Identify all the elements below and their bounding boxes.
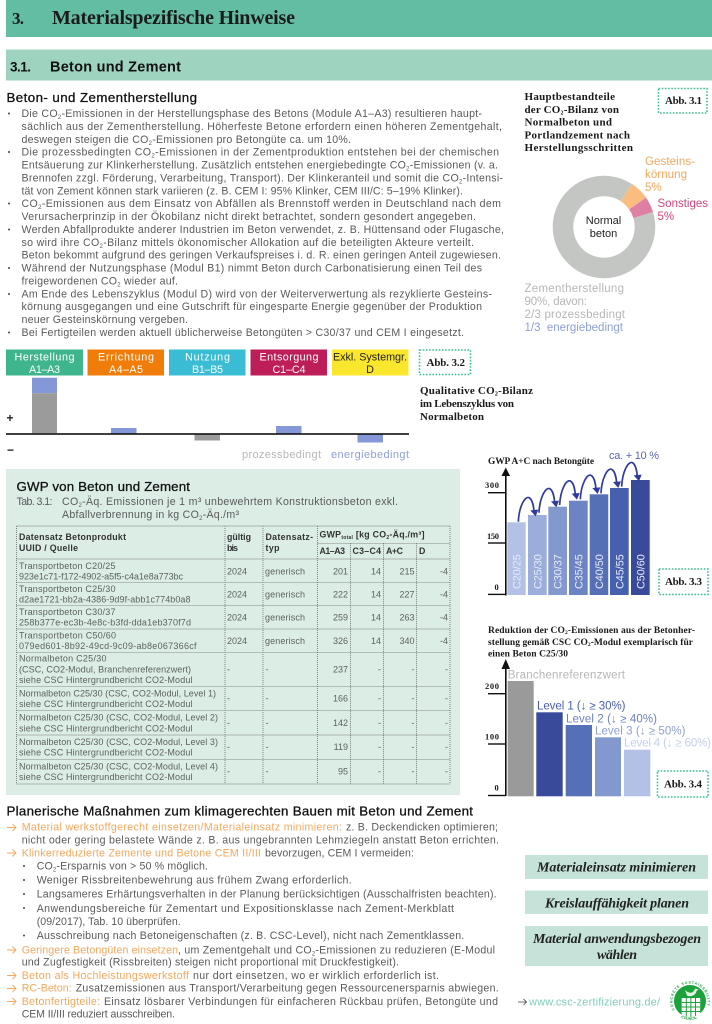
text block: production bullet list: Bei Fertigteilen werden aktuell üblicherweise Betongüten > C30/37 und CEM I eingesetzt. [22, 327, 464, 339]
text block: production bullet list: körnung ausgegangen und eine Gutschrift für eingesparte Energie gegenüber der Produktion [22, 301, 482, 313]
text block: planning measures: Geringere Betongüten einsetzen [22, 944, 178, 956]
figure title: Abb 3.1: der CO [524, 104, 560, 116]
text block: planning measures: RC-Beton: [22, 983, 72, 995]
bar chart: qualitative life cycle balance: − [7, 443, 14, 457]
table: GWP data: Normalbeton C25/30 [19, 654, 106, 664]
text block: production bullet list: -Emissionen pro Betongüte ca. um 10%. [152, 134, 351, 146]
table: GWP data: 14 [371, 612, 381, 622]
bar chart: Reduktion nach CSC CO2-Modul: Level 1 (↓ ≥ 30%) [537, 701, 626, 713]
text block: planning measures: 2 [312, 951, 316, 957]
text block: planning measures: und Zugfestigkeit (Rissbreiten) steigen nicht proportional mit Druckfestigkeit). [22, 957, 399, 969]
life cycle phase headers: Herstellung [14, 352, 74, 364]
bar chart: GWP A+C nach Betongüte: C25/30 [532, 554, 544, 589]
table: GWP data: bis [227, 543, 238, 553]
text block: production bullet list: 2 [117, 282, 121, 288]
section header bar: Beton und Zement [50, 60, 181, 76]
life cycle phase headers: B1–B5 [192, 364, 223, 376]
life cycle phase headers: A1–A3 [29, 364, 60, 376]
table: GWP data: -4 [440, 566, 448, 576]
text block: planning measures: Beton als Hochleistungswerkstoff [22, 970, 189, 982]
text block: production bullet list: 2 [100, 244, 104, 250]
table: GWP data: GWP [320, 530, 341, 540]
text block: production bullet list: -Emissionen in der Herstellungsphase des Betons (Module A1–A3) resultieren haupt- [61, 108, 482, 120]
bar chart: GWP A+C nach Betongüte: 150 [487, 531, 499, 541]
text block: planning measures: , um Zementgehalt und CO [178, 944, 312, 956]
figure title: Abb 3.1: Herstellungsschritten [524, 142, 633, 154]
table: GWP data: -4 [440, 636, 448, 646]
table: GWP data: Datensatz- [266, 532, 313, 542]
table: GWP data: 259 [333, 612, 348, 622]
life cycle phase headers [6, 350, 408, 376]
label: Abb. 3.4 [658, 771, 708, 797]
bar chart: GWP A+C nach Betongüte: C35/45 [574, 554, 586, 589]
table: GWP data: 079ed601-8b92-49cd-9c09-ab8e067366cf [19, 641, 197, 651]
text block: planning measures: Weniger Rissbreitenbewehrung aus frühem Zwang erforderlich. [37, 875, 352, 887]
life cycle phase headers: Exkl. Systemgr. [333, 352, 407, 364]
bar chart: qualitative life cycle balance: prozessbedingt [242, 449, 321, 461]
bar chart: GWP A+C nach Betongüte: C45/55 [614, 554, 626, 589]
text block: production bullet list: 2 [406, 166, 410, 172]
donut label: Sonstiges: 5% [658, 211, 674, 223]
chapter header bar [6, 0, 712, 37]
text block: production bullet list: neuer Gesteinskörnung vergeben. [22, 314, 188, 326]
table: GWP data: 142 [333, 718, 348, 728]
table: GWP data: siehe CSC Hintergrundbericht CO2-Modul [19, 699, 192, 709]
life cycle phase headers: A4–A5 [109, 364, 143, 376]
table: GWP data: D [419, 546, 425, 556]
table: GWP data: siehe CSC Hintergrundbericht CO2-Modul [19, 723, 192, 733]
callout: Materialeinsatz minimieren [525, 855, 708, 879]
table: GWP data: - [227, 718, 230, 728]
donut label: Zementherstellung: 90%, davon: [524, 296, 587, 308]
chapter header bar: Materialspezifische Hinweise [52, 7, 295, 29]
table: GWP data: 340 [399, 636, 414, 646]
table: GWP data: - [266, 766, 268, 776]
label: Abb. 3.3: Abb. 3.3 [665, 576, 702, 588]
label: Abb. 3.2: Abb. 3.2 [426, 357, 466, 369]
text block: production bullet list: -Emissionen (v. a. [410, 160, 498, 172]
text block: production bullet list: sächlich aus der Zementherstellung. Höherfeste Betone erfordern einen höheren Zementgehalt, [22, 121, 502, 133]
table: GWP data: 14 [371, 566, 381, 576]
table: GWP data: - [378, 766, 381, 776]
table: GWP data: 2024 [227, 612, 247, 622]
table: GWP data: 201 [333, 566, 348, 576]
table: GWP data: -4 [440, 612, 448, 622]
table: GWP data: Normalbeton C25/30 (CSC, CO2-Modul, Level 3) [19, 737, 218, 747]
text block: planning measures: nicht oder gering belastete Wände z. B. aus ungebrannten Lehmziegeln anstatt Beton errichten. [22, 835, 499, 847]
text block: planning measures: Langsameres Erhärtungsverhalten in der Planung berücksichtigen (Ausschalfristen beachten). [37, 889, 497, 901]
donut label: Sonstiges [658, 198, 708, 223]
text block: planning measures: bevorzugen, CEM I vermeiden: [265, 847, 414, 859]
callout: Material anwendungsbezogen wählen [525, 926, 708, 966]
figure title: Abb 3.2: Normalbeton [420, 411, 484, 423]
donut label: Zementherstellung: Zementherstellung [524, 283, 624, 295]
bar chart: GWP A+C nach Betongüte: GWP A+C nach Betongüte [488, 457, 594, 467]
table: GWP data: Transportbeton C50/60 [19, 630, 116, 640]
bar chart: Reduktion nach CSC CO2-Modul: einen Beton C25/30 [488, 650, 568, 660]
text block: planning measures: 2 [53, 868, 57, 874]
figure title: Abb 3.2: -Bilanz [498, 385, 533, 397]
text block: production bullet list: 2 [58, 115, 62, 121]
table: GWP data: 263 [399, 612, 414, 622]
link: CSC website: www.csc-zertifizierung.de/ [528, 996, 661, 1008]
table: GWP data: - [412, 742, 414, 752]
text block: production bullet list: 2 [459, 179, 463, 185]
label: Abb. 3.1 [658, 88, 707, 113]
bar chart: qualitative life cycle balance [6, 378, 409, 461]
label: Abb. 3.1: Abb. 3.1 [665, 95, 702, 107]
donut label: Zementherstellung: 2/3 prozessbedingt [524, 309, 626, 321]
text block: planning measures: Material werkstoffgerecht einsetzen/Materialeinsatz minimieren: [22, 822, 342, 834]
donut label: Gesteinskörnung: 5% [645, 182, 662, 194]
text block: planning measures: (09/2017), Tab. 10 überprüfen. [37, 916, 181, 928]
bar chart: Reduktion nach CSC CO2-Modul: 2 [565, 630, 568, 636]
table: GWP data: 222 [333, 590, 348, 600]
text block: production bullet list: Beton bekommt aufgrund des geringen Verkaufspreises i. d. R. einen geringen Anteil zugewiesen. [22, 250, 501, 262]
table: GWP data: siehe CSC Hintergrundbericht CO2-Modul [19, 772, 192, 782]
text block: planning measures: -Emissionen zu reduzieren (E-Modul [315, 944, 495, 956]
figure title: Abb 3.2 [420, 385, 533, 423]
donut label: Zementherstellung [524, 283, 626, 334]
callout: Materialeinsatz minimieren: Materialeinsatz minimieren [536, 861, 696, 876]
text block: production bullet list: deswegen steigen die CO [22, 134, 148, 146]
bar chart: GWP A+C nach Betongüte [485, 450, 659, 596]
growth arrows [518, 462, 642, 522]
table: GWP data: (CSC, CO2-Modul, Branchenreferenzwert) [19, 664, 191, 674]
text block: planning measures: CO [37, 861, 53, 873]
table: GWP data: 95 [338, 766, 348, 776]
text block: planning measures: Ausschreibung nach Betoneigenschaften (z. B. CSC-Level), nicht nach Zementklassen. [37, 930, 464, 942]
text block: planning measures [7, 822, 499, 1021]
donut label: Gesteinskörnung: körnung [645, 169, 687, 181]
bar chart: Reduktion nach CSC CO2-Modul: Reduktion der CO [488, 626, 565, 636]
callout: Kreislauffähigkeit planen [525, 890, 708, 914]
text block: planning measures: Zusatzemissionen aus Transport/Verarbeitung gegen Ressourcenersparnis abwiegen. [76, 983, 499, 995]
text block: production bullet list: Während der Nutzungsphase (Modul B1) nimmt Beton durch Carbonatisierung einen Teil des [22, 263, 482, 275]
table: GWP data: - [445, 718, 448, 728]
table: GWP data: 14 [371, 590, 381, 600]
bar chart: Reduktion nach CSC CO2-Modul: Level 2 (↓ ≥ 40%) [566, 713, 657, 725]
figure title: Abb 3.1 [524, 91, 633, 154]
table: GWP data: siehe CSC Hintergrundbericht CO2-Modul [19, 748, 192, 758]
text block: production bullet list: Die CO [22, 108, 58, 120]
text block: production bullet list: CO [22, 198, 38, 210]
table: GWP data: 119 [334, 742, 348, 752]
table: GWP data: 2024 [227, 636, 247, 646]
table caption: Tab. 3.1: [16, 496, 52, 508]
table: GWP data: - [266, 718, 268, 728]
table: GWP data: - [412, 718, 414, 728]
heading: Beton- und Zementherstellung: Beton- und Zementherstellung [6, 90, 197, 105]
table: GWP data: - [378, 664, 381, 674]
table: GWP data: - [412, 694, 414, 704]
text block: production bullet list: -Emissionen in der Zementproduktion entstehen bei der chemischen [155, 147, 499, 159]
text block: production bullet list: Brennofen zzgl. Förderung, Verarbeitung, Transport). Der Klinkeranteil und somit die CO [22, 172, 459, 184]
table: GWP data: Transportbeton C20/25 [19, 561, 116, 571]
bar chart: Reduktion nach CSC CO2-Modul: -Modul exemplarisch für [591, 638, 694, 648]
bar chart: Reduktion nach CSC CO2-Modul: Branchenreferenzwert [508, 669, 626, 681]
bar chart: qualitative life cycle balance: energiebedingt [331, 449, 409, 461]
text block: planning measures: CEM II/III reduziert ausschreiben. [22, 1009, 175, 1021]
table: GWP data: - [227, 694, 230, 704]
table: GWP data: C3–C4 [352, 546, 381, 556]
bar chart: GWP A+C nach Betongüte: 300 [485, 480, 499, 490]
figure title: Abb 3.1: -Bilanz von [564, 104, 619, 116]
text block: production bullet list: Werden Abfallprodukte anderer Industrien im Beton verwendet, z. B. Hüttensand oder Flugasche, [22, 224, 504, 236]
icon: CSC logo: COUNCIL [682, 1016, 697, 1020]
callout: Material anwendungsbezogen wählen: Material anwendungsbezogen [532, 932, 701, 947]
text block: production bullet list: Am Ende des Lebenszyklus (Modul D) wird von der Weiterverwertung als rezyklierte Gesteins- [22, 288, 492, 300]
text block: production bullet list: so wird ihre CO [22, 237, 99, 249]
table: GWP data: typ [266, 543, 280, 553]
table: GWP data: -Äq./m³] [389, 530, 425, 540]
table: GWP data: 2024 [227, 590, 247, 600]
table: GWP data: - [445, 664, 448, 674]
table: GWP data: 166 [333, 694, 348, 704]
table: GWP data: 227 [399, 590, 414, 600]
table: GWP data: - [378, 742, 381, 752]
text block: production bullet list: tät von Zement können stark variieren (z. B. CEM I: 95% Klinker, CEM III/C: 5–19% Klinker). [22, 185, 463, 197]
text block: production bullet list: 2 [38, 205, 42, 211]
text block: planning measures: Anwendungsbereiche für Zementart und Expositionsklasse nach Zement-Merkblatt [37, 903, 454, 915]
table: GWP data: A+C [386, 546, 404, 556]
bar chart: GWP A+C nach Betongüte: C30/37 [552, 554, 564, 589]
table: GWP data: siehe CSC Hintergrundbericht CO2-Modul [19, 675, 192, 685]
table: GWP data [16, 526, 450, 784]
table: GWP data: - [266, 664, 268, 674]
bar chart: Reduktion nach CSC CO2-Modul: 0 [494, 783, 499, 793]
table: GWP data: - [227, 766, 230, 776]
panel: GWP von Beton und Zement [6, 469, 460, 795]
table: GWP data: 215 [399, 566, 414, 576]
text block: production bullet list: -Intensi- [463, 172, 503, 184]
table caption: CO [62, 496, 78, 508]
figure title: Abb 3.1: Normalbeton und [524, 117, 612, 129]
table: GWP data: gültig [227, 532, 251, 542]
table: GWP data: 2 [386, 535, 389, 541]
table caption: -Äq./m³ [203, 509, 239, 521]
text block: planning measures: -Ersparnis von > 50 % möglich. [56, 861, 208, 873]
life cycle phase headers: Entsorgung [260, 352, 318, 364]
bar chart: Reduktion nach CSC CO2-Modul [485, 626, 711, 796]
table: GWP data: - [266, 694, 268, 704]
table: GWP data: - [227, 664, 230, 674]
table: GWP data: Transportbeton C30/37 [19, 607, 116, 617]
table caption: 2 [78, 503, 82, 509]
donut chart: Normalbeton: Normal [586, 215, 621, 227]
text block: production bullet list: Verursacherprinzip in der Ökobilanz nicht direkt betrachtet, sondern gesondert angegeben. [22, 211, 476, 223]
text block: production bullet list: 2 [149, 141, 153, 147]
text block: production bullet list [8, 108, 504, 339]
table: GWP data: generisch [265, 636, 305, 646]
text block: production bullet list: -Bilanz mittels ökonomischer Allokation auf die beteiligten Akteure verteilt. [103, 237, 474, 249]
panel heading: GWP von Beton und Zement [16, 479, 190, 494]
label: Abb. 3.4: Abb. 3.4 [664, 779, 702, 791]
icon: CSC logo: CONCRETE SUSTAINABILITY [670, 981, 710, 1010]
table: GWP data: 923e1c71-f172-4902-a5f5-c4a1e8a773bc [19, 572, 184, 582]
table: GWP data: - [412, 664, 414, 674]
table: GWP data: - [412, 766, 414, 776]
table: GWP data: generisch [265, 566, 305, 576]
table: GWP data: total [341, 535, 354, 541]
donut label: Gesteinskörnung: Gesteins- [645, 156, 695, 168]
text block: planning measures: nur dort einsetzen, wo er wirklich erforderlich ist. [193, 970, 439, 982]
text block: production bullet list: freigewordenen CO [22, 275, 117, 287]
life cycle phase headers: D [366, 364, 374, 376]
bar chart: Reduktion nach CSC CO2-Modul: stellung gemäß CSC CO [488, 638, 588, 648]
table: GWP data: 14 [371, 636, 381, 646]
table: GWP data: 237 [333, 664, 348, 674]
callout: Kreislauffähigkeit planen: Kreislauffähigkeit planen [544, 897, 689, 912]
donut chart: Normalbeton [563, 186, 645, 268]
table: GWP data: -4 [440, 590, 448, 600]
donut label: Gesteinskörnung [645, 156, 695, 194]
donut label: Zementherstellung: 1/3 energiebedingt [524, 322, 624, 334]
life cycle phase headers: Errichtung [98, 352, 154, 364]
figure title: Abb 3.2: im Lebenszyklus von [420, 398, 514, 410]
label: Abb. 3.3 [659, 569, 708, 594]
figure title: Abb 3.2: 2 [495, 392, 498, 398]
table: GWP data: - [445, 766, 448, 776]
bar chart: GWP A+C nach Betongüte: 0 [494, 582, 499, 592]
table: GWP data: - [227, 742, 230, 752]
table: GWP data: Normalbeton C25/30 (CSC, CO2-Modul, Level 1) [19, 688, 216, 698]
table: GWP data: generisch [265, 612, 305, 622]
table: GWP data: 2024 [227, 566, 247, 576]
table caption: Abfallverbrennung in kg CO [62, 509, 199, 521]
bar chart: GWP A+C nach Betongüte: C40/50 [594, 554, 606, 589]
chapter header bar: 3. [12, 9, 24, 28]
text block: planning measures: Einsatz lösbarer Verbindungen für einfacheren Rückbau prüfen, Betongüte und [104, 996, 498, 1008]
bar chart: Reduktion nach CSC CO2-Modul: 100 [485, 732, 499, 742]
bar chart: Reduktion nach CSC CO2-Modul: Level 4 (↓ ≥ 60%) [624, 738, 711, 750]
figure title: Abb 3.1: 2 [561, 110, 564, 116]
bar chart: qualitative life cycle balance: + [6, 411, 14, 425]
table: GWP data: Datensatz Betonprodukt [19, 532, 126, 542]
heading: Planerische Maßnahmen: Planerische Maßnahmen zum klimagerechten Bauen mit Beton und Zement [6, 804, 473, 819]
text block: production bullet list: Die prozessbedingten CO [22, 147, 151, 159]
bar chart: GWP A+C nach Betongüte: C50/60 [636, 554, 648, 589]
life cycle phase headers: Nutzung [185, 352, 230, 364]
table: GWP data: - [378, 694, 381, 704]
table: GWP data: 258b377e-ec3b-4e8c-b3fd-dda1eb370f7d [19, 618, 191, 628]
table caption: -Äq. Emissionen je 1 m³ unbewehrtem Konstruktionsbeton exkl. [82, 496, 398, 508]
donut label: Sonstiges: Sonstiges [658, 198, 708, 210]
life cycle phase headers: C1–C4 [272, 364, 306, 376]
table: GWP data: - [266, 742, 268, 752]
figure title: Abb 3.1: Portlandzement nach [524, 129, 630, 141]
table: GWP data: A1–A3 [320, 546, 345, 556]
text block: production bullet list: 2 [151, 154, 155, 160]
table: GWP data: - [445, 694, 448, 704]
text block: production bullet list: Entsäuerung zur Klinkerherstellung. Zusätzlich entstehen energiebedingte CO [22, 160, 406, 172]
figure title: Abb 3.2: Qualitative CO [420, 385, 495, 397]
bar chart: Reduktion nach CSC CO2-Modul: 2 [588, 642, 591, 648]
table: GWP data: [kg CO [353, 530, 386, 540]
bar chart: GWP A+C nach Betongüte: C20/25 [512, 554, 524, 589]
text block: production bullet list: -Emissionen aus dem Einsatz von Abfällen als Brennstoff werden in Deutschland nach dem [42, 198, 501, 210]
callout: Material anwendungsbezogen wählen: wählen [597, 948, 637, 963]
table: GWP data: UUID / Quelle [19, 543, 78, 553]
figure title: Abb 3.1: Hauptbestandteile [524, 91, 615, 103]
bar chart: Reduktion nach CSC CO2-Modul: 200 [485, 681, 499, 691]
section header bar: 3.1. [10, 60, 31, 74]
table: GWP data: generisch [265, 590, 305, 600]
bar chart: GWP A+C nach Betongüte: ca. + 10 % [609, 450, 659, 462]
table: GWP data: Transportbeton C25/30 [19, 584, 116, 594]
bar chart: Reduktion nach CSC CO2-Modul: Level 3 (↓ ≥ 50%) [595, 725, 686, 737]
table caption: 2 [199, 516, 203, 522]
table: GWP data: d2ae1721-bb2a-4386-9d9f-abb1c774b0a8 [19, 595, 190, 605]
table: GWP data: 326 [333, 636, 348, 646]
section header bar [6, 50, 712, 80]
table: GWP data: - [378, 718, 381, 728]
text block: production bullet list: wieder auf. [121, 275, 178, 287]
table: GWP data: Normalbeton C25/30 (CSC, CO2-Modul, Level 2) [19, 713, 218, 723]
text block: planning measures: z. B. Deckendicken optimieren; [346, 822, 498, 834]
donut chart: Normalbeton: beton [590, 228, 617, 240]
text block: planning measures: Klinkerreduzierte Zemente und Betone CEM II/III [22, 847, 261, 859]
text block: planning measures: Betonfertigteile: [22, 996, 100, 1008]
label: Abb. 3.2 [420, 350, 470, 374]
table: GWP data: Normalbeton C25/30 (CSC, CO2-Modul, Level 4) [19, 761, 218, 771]
bar chart: Reduktion nach CSC CO2-Modul: -Emissionen aus der Betonher- [568, 626, 695, 636]
table: GWP data: - [445, 742, 448, 752]
table caption [16, 496, 398, 522]
